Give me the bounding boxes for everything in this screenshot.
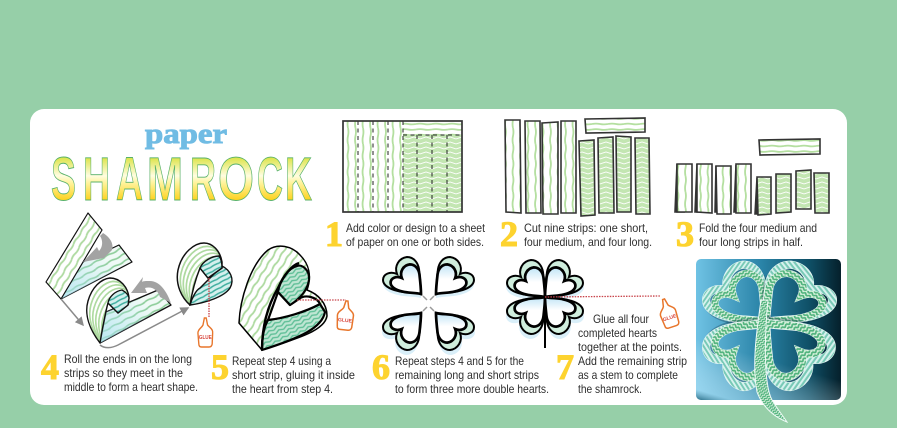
heading: shamrock: R [190, 145, 216, 213]
step 6 text: Repeat steps 4 and 5 for the [395, 355, 524, 368]
step 7 text: together at the points. [578, 341, 682, 354]
step 6 [372, 257, 549, 396]
step 1 text: Add color or design to a sheet [346, 222, 486, 235]
four leaf clover outline [506, 260, 584, 348]
step 5 text: short strip, gluing it inside [232, 369, 355, 382]
flat folded strip [46, 213, 132, 299]
arrow between stages 2 [100, 308, 188, 348]
number 4: 4 [41, 347, 59, 387]
ribbon clover [706, 265, 832, 387]
glue dotted line [297, 299, 346, 301]
step 3 text: four long strips in half. [699, 236, 803, 249]
number 2: 2 [500, 214, 518, 254]
step 7 text [578, 313, 687, 396]
heading: shamrock: A [116, 145, 143, 213]
half rolled strip [86, 277, 172, 344]
number 7: 7 [556, 347, 574, 387]
number 1: 1 [325, 214, 343, 254]
heading: shamrock: H [83, 145, 110, 213]
number 5: 5 [211, 347, 229, 387]
number 6: 6 [372, 347, 390, 387]
step 3 [675, 139, 829, 254]
heading: shamrock: K [285, 145, 312, 213]
step 5 text: Repeat step 4 using a [232, 355, 331, 368]
step 6 text [395, 355, 549, 396]
glue dotted line [208, 278, 210, 318]
nine cut strips [505, 118, 650, 216]
step 2 text: Cut nine strips: one short, [524, 222, 648, 235]
step 6 text: remaining long and short strips [395, 369, 539, 382]
curved arrow 1 [83, 233, 113, 262]
step 4 text: middle to form a heart shape. [64, 381, 198, 394]
step 3 text [699, 222, 817, 249]
sheet of paper illustration [343, 121, 462, 212]
converging arrows [423, 296, 434, 311]
step 7 text: Glue all four [593, 313, 649, 326]
step 7 text: completed hearts [578, 327, 657, 340]
arrow between stages 1 [61, 299, 83, 325]
step 1 text: of paper on one or both sides. [346, 236, 484, 249]
partial heart [176, 242, 233, 306]
heading: shamrock: O [218, 145, 254, 213]
icon: glue bottle [656, 297, 680, 329]
step 5 text: the heart from step 4. [232, 383, 333, 396]
step 5 text [232, 355, 355, 396]
step 7 text: as a stem to complete [578, 369, 678, 382]
heading: paper: paper [145, 118, 227, 150]
title [51, 118, 312, 213]
number 3: 3 [676, 214, 694, 254]
step 6 text: to form three more double hearts. [395, 383, 549, 396]
step 2 text [524, 222, 652, 249]
step 4 text: strips so they meet in the [64, 367, 183, 380]
step 7 text: Add the remaining strip [578, 355, 687, 368]
four separate double hearts [382, 257, 475, 355]
icon: glue bottle [198, 318, 213, 347]
heading: shamrock: S [51, 145, 76, 213]
finished shamrock photo [696, 259, 841, 422]
white panel [30, 109, 847, 405]
folded strips [675, 139, 829, 215]
step 4 text: Roll the ends in on the long [64, 353, 192, 366]
double heart illustration [239, 246, 327, 350]
heading: shamrock: M [147, 145, 183, 213]
step 1 text [346, 222, 486, 249]
heading: shamrock [51, 145, 312, 213]
step 3 text: Fold the four medium and [699, 222, 817, 235]
step 1 [325, 121, 486, 254]
step 4 [41, 213, 237, 394]
photo background [696, 259, 841, 400]
step 2 text: four medium, and four long. [524, 236, 652, 249]
step 4 text [64, 353, 198, 394]
heading: shamrock: C [257, 145, 283, 213]
step 2 [500, 118, 652, 254]
ribbon stem [755, 300, 787, 422]
step 7 text: the shamrock. [578, 383, 642, 396]
icon: glue bottle [336, 300, 355, 331]
step 5 [211, 246, 355, 396]
step 7 [506, 260, 687, 396]
curved arrow 2 [131, 277, 171, 303]
glue dotted line [545, 296, 660, 297]
